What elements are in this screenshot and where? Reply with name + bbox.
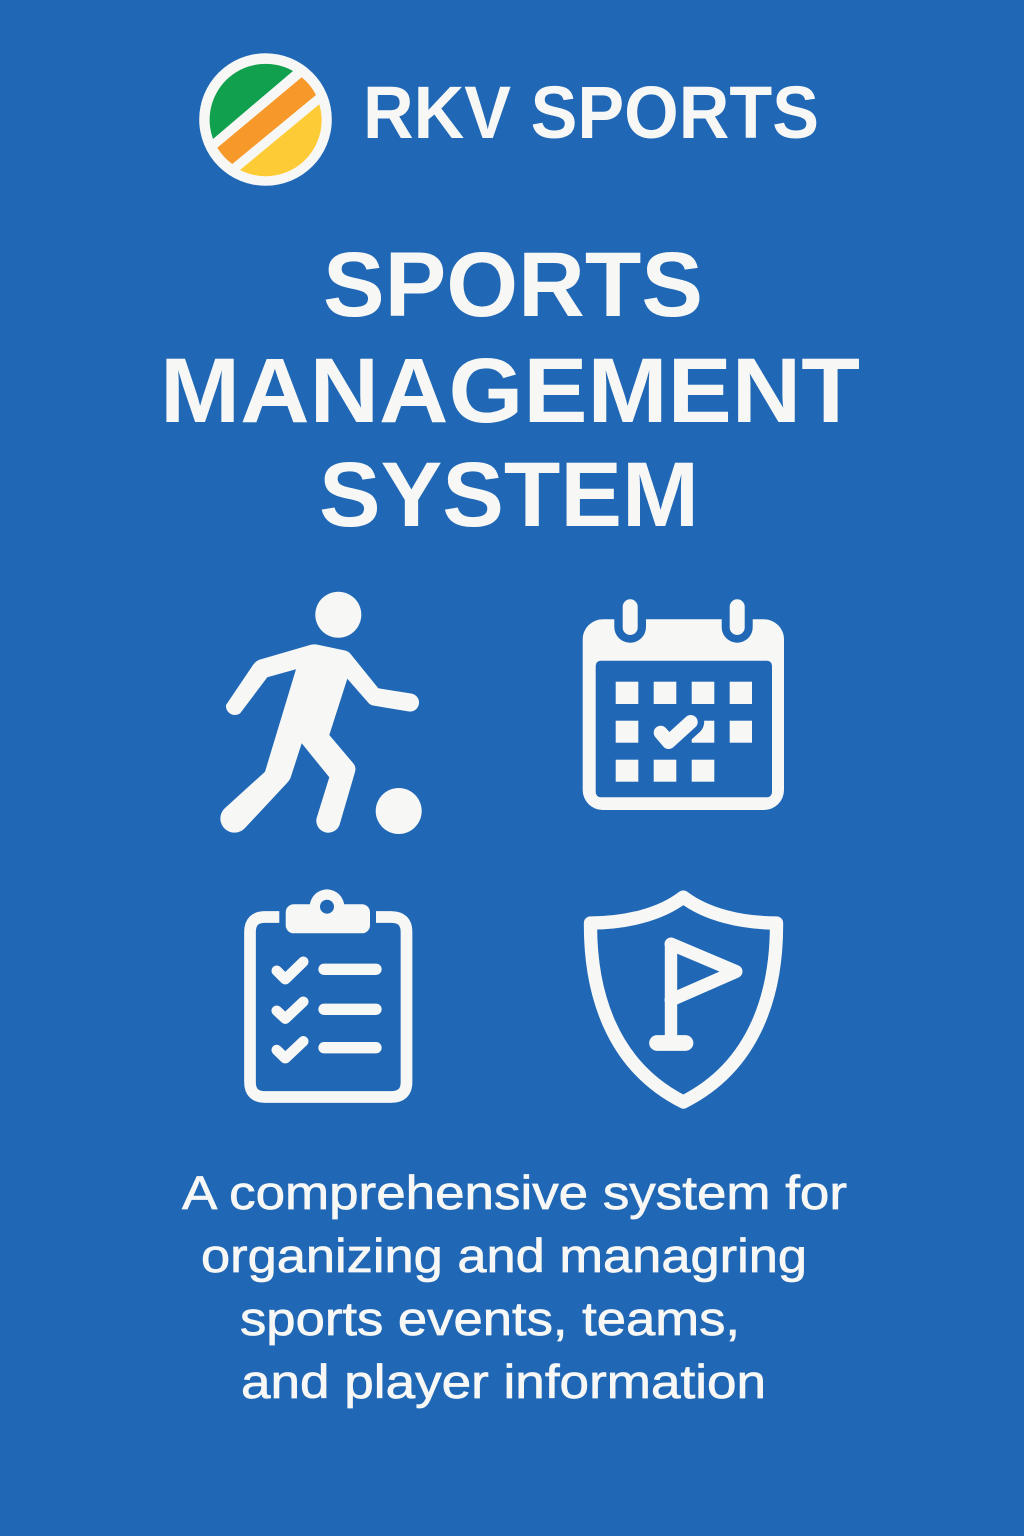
- title: SPORTS: [323, 234, 703, 336]
- brand name: RKV SPORTS: [363, 71, 819, 154]
- title: [160, 234, 860, 546]
- logo: [199, 53, 332, 186]
- title: MANAGEMENT: [160, 340, 860, 442]
- description: sports events, teams,: [240, 1292, 740, 1345]
- icon: shield with flag: [590, 897, 777, 1102]
- description: organizing and managring: [201, 1229, 807, 1282]
- title: SYSTEM: [319, 444, 699, 546]
- icon: soccer player: [220, 592, 422, 834]
- icon: clipboard checklist: [250, 889, 406, 1097]
- description: and player information: [241, 1355, 766, 1408]
- description: [182, 1166, 847, 1408]
- description: A comprehensive system for: [182, 1166, 847, 1219]
- icon: calendar: [583, 599, 784, 810]
